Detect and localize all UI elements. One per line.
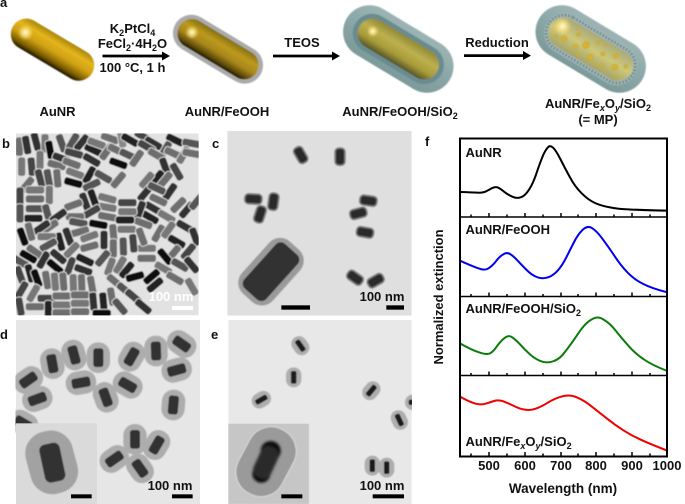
panel label b: b — [2, 136, 10, 151]
scheme caption: AuNR/FeOOH: AuNR/FeOOH — [185, 104, 269, 119]
spectrum: AuNR/FexOy/SiO2 (red): O — [525, 434, 536, 449]
scheme arrow: Reduction — [464, 35, 531, 60]
scheme arrow 1 with reagents: 2 — [119, 28, 124, 38]
spectrum: AuNR/FexOy/SiO2 (red) — [460, 396, 667, 451]
scheme arrow: TEOS — [273, 35, 340, 60]
panel d: TEM of AuNR/FeOOH/SiO2: 100 nm — [148, 478, 192, 493]
panel e: TEM of AuNR/FexOy/SiO2: 100 nm — [360, 478, 404, 493]
x axis tick labels: 600 — [514, 458, 536, 473]
scheme arrow 1 with reagents: FeCl — [98, 36, 126, 51]
scheme caption: AuNR/FeOOH/SiO2: AuNR/FeOOH/SiO — [342, 104, 453, 119]
panel label d: d — [0, 327, 8, 342]
x axis tick labels: 700 — [550, 458, 572, 473]
inset d — [16, 423, 97, 504]
spectrum: AuNR (black) — [460, 145, 667, 211]
scheme arrow 1 with reagents: PtCl — [124, 21, 150, 36]
scheme caption: AuNR/FexOy/SiO2 (= MP): AuNR/Fe — [545, 96, 600, 111]
scheme arrow 1 with reagents: 2 — [126, 43, 131, 53]
panel label e: e — [211, 327, 218, 342]
panel b: TEM of gold nanorods — [16, 133, 199, 316]
panel d: TEM of AuNR/FeOOH/SiO2 — [4, 320, 201, 504]
spectrum: AuNR/FeOOH/SiO2 (green): 2 — [576, 308, 581, 318]
x axis tick labels: 800 — [585, 458, 607, 473]
scheme arrow 1 with reagents: 4 — [150, 28, 155, 38]
panel f: normalized extinction spectra — [431, 138, 681, 496]
scheme: AuNR/FeOOH rod — [166, 8, 270, 91]
spectrum: AuNR/FexOy/SiO2 (red): 2 — [567, 441, 572, 451]
scheme caption: AuNR/FexOy/SiO2 (= MP): O — [605, 96, 615, 111]
scheme arrow 1 with reagents: K — [110, 21, 119, 36]
panel label c: c — [212, 136, 219, 151]
scheme arrow 1 with reagents: O — [157, 36, 167, 51]
chart frame and dividers — [460, 138, 667, 456]
scheme caption: AuNR/FexOy/SiO2 (= MP) — [545, 96, 651, 127]
y axis title: Normalized extinction — [431, 229, 446, 365]
scheme caption: AuNR/FexOy/SiO2 (= MP): x — [599, 103, 606, 113]
panel e: TEM of AuNR/FexOy/SiO2 — [227, 320, 425, 504]
spectrum: AuNR/FeOOH (blue) — [460, 222, 667, 292]
scheme: AuNR/FeOOH/SiO2 rod — [333, 0, 463, 103]
scale bar: 100 nm — [149, 289, 193, 304]
scheme: AuNR rod — [5, 13, 100, 87]
scheme: AuNR/FexOy/SiO2 rod — [526, 0, 656, 103]
spectrum: AuNR/FeOOH (blue): AuNR/FeOOH — [466, 222, 550, 237]
scheme arrow: TEOS: TEOS — [284, 35, 320, 50]
scheme caption: AuNR/FexOy/SiO2 (= MP): y — [614, 103, 621, 113]
scheme arrow 1 with reagents: 2 — [152, 43, 157, 53]
scheme caption: AuNR/FexOy/SiO2 (= MP): 2 — [646, 103, 651, 113]
scheme caption: AuNR/FexOy/SiO2 (= MP): (= MP) — [578, 112, 618, 127]
x axis title: Wavelength (nm) — [509, 481, 617, 496]
spectrum: AuNR (black): AuNR — [466, 145, 502, 160]
x axis tick labels — [478, 458, 681, 473]
spectrum: AuNR/FexOy/SiO2 (red): x — [519, 441, 526, 451]
spectrum: AuNR/FeOOH/SiO2 (green): AuNR/FeOOH/SiO — [466, 301, 576, 316]
spectrum: AuNR/FeOOH/SiO2 (green) — [460, 301, 667, 371]
scheme caption: AuNR: AuNR — [39, 104, 76, 119]
scheme arrow: Reduction: Reduction — [465, 35, 529, 50]
scheme caption: AuNR/FeOOH/SiO2: 2 — [453, 111, 458, 121]
panel c: TEM of AuNR/FeOOH: 100 nm — [360, 289, 404, 304]
spectrum: AuNR/FexOy/SiO2 (red): AuNR/Fe — [466, 434, 520, 449]
panel label f: f — [425, 134, 430, 149]
x axis tick labels: 900 — [621, 458, 643, 473]
scheme caption: AuNR/FexOy/SiO2 (= MP): /SiO — [620, 96, 646, 111]
x axis tick labels: 500 — [478, 458, 500, 473]
scheme arrow 1 with reagents — [98, 21, 170, 75]
panel c: TEM of AuNR/FeOOH — [227, 131, 412, 316]
spectrum: AuNR/FexOy/SiO2 (red): /SiO — [541, 434, 567, 449]
x axis tick labels: 1000 — [653, 458, 681, 473]
scheme arrow 1 with reagents: ·4H — [131, 36, 152, 51]
spectrum: AuNR/FexOy/SiO2 (red): y — [535, 441, 542, 451]
scheme arrow 1 with reagents: 100 °C, 1 h — [100, 60, 166, 75]
inset e — [227, 418, 309, 504]
